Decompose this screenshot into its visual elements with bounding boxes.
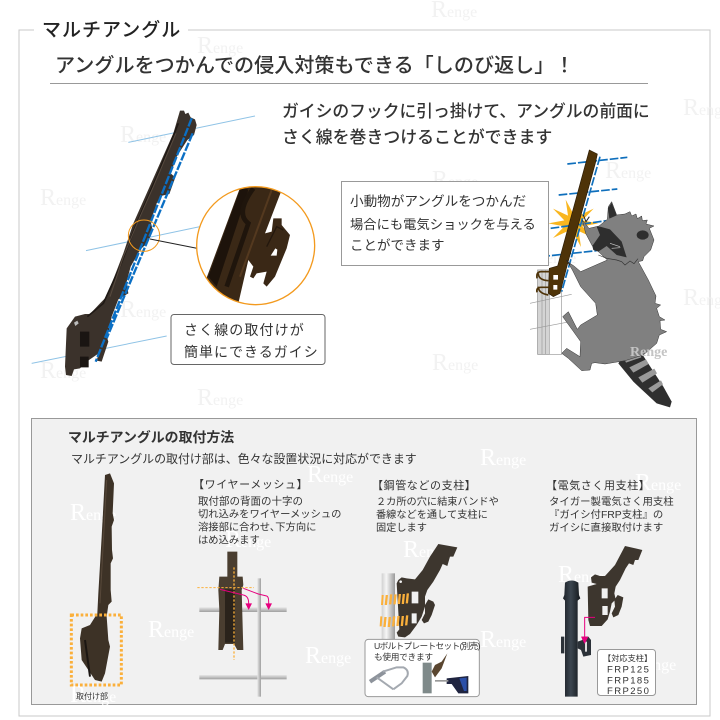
illustration: steel pipe mounting	[365, 544, 479, 697]
column: wire mesh text: 溶接部に合わせ､下方向に	[198, 520, 316, 534]
column: steel pipe text: ２カ所の穴に結束バンドや	[376, 495, 499, 508]
fence post	[530, 270, 572, 354]
column: electric fence text	[549, 495, 674, 534]
text: intro description: さく線を巻きつけることができます	[282, 127, 552, 147]
panel watermarks: Renge	[558, 562, 604, 588]
panel watermarks: Renge	[70, 500, 116, 526]
magnifier	[128, 220, 160, 251]
panel heading: マルチアングルの取付方法	[68, 429, 234, 445]
column: wire mesh text	[198, 494, 341, 546]
blue dashed lines	[96, 118, 193, 362]
angle bracket	[65, 111, 197, 376]
u-bolt note text: も使用できます	[374, 651, 433, 662]
supported posts box: 【対応支柱】	[603, 653, 652, 663]
raccoon body	[562, 202, 667, 371]
fence wires	[541, 157, 627, 292]
column: electric fence text: ガイシに直接取付けます	[549, 521, 663, 534]
callout: insulator: 簡単にできるガイシ	[184, 344, 319, 360]
callout: insulator	[171, 314, 325, 364]
spark	[548, 200, 598, 247]
heading: アングルをつかんでの侵入対策もできる「しのび返し」！	[55, 54, 574, 77]
title: section tab: マルチアングル	[42, 19, 181, 41]
panel watermarks: Renge	[403, 537, 449, 563]
background watermarks: Renge	[197, 385, 243, 411]
text: intro description	[282, 102, 650, 147]
u-bolt note text	[374, 640, 481, 662]
illustration: angle with wire	[32, 111, 320, 376]
panel intro text: マルチアングルの取付け部は、色々な設置状況に対応ができます	[71, 451, 417, 466]
panel watermarks: Renge	[225, 527, 271, 553]
background watermarks: Renge	[40, 358, 86, 384]
raccoon face mask	[592, 227, 627, 257]
column: electric fence text: タイガー製電気さく用支柱	[549, 495, 674, 508]
panel watermarks	[70, 445, 681, 708]
column: wire mesh text: 切れ込みをワイヤーメッシュの	[198, 508, 341, 520]
supported posts box: FRP250	[607, 686, 650, 697]
callout: small animals: 場合にも電気ショックを与える	[350, 217, 536, 232]
callout: small animals	[342, 182, 548, 266]
column: full angle	[71, 473, 121, 685]
panel watermarks: Renge	[480, 627, 526, 653]
supported posts box	[598, 650, 656, 697]
illustration: wire mesh mounting	[197, 552, 287, 697]
background watermarks: Renge	[40, 185, 86, 211]
mounting label: 取付け部	[76, 691, 108, 701]
column: wire mesh text: はめ込みます	[198, 534, 260, 546]
supported posts box: FRP125	[607, 664, 650, 676]
background watermarks: Renge	[197, 33, 243, 59]
background watermarks: Renge	[432, 350, 478, 376]
panel watermarks: Renge	[635, 470, 681, 496]
column: steel pipe text: 番線などを通して支柱に	[376, 508, 488, 521]
column: steel pipe text	[376, 495, 499, 534]
column: steel pipe heading: 【鋼管などの支柱】	[372, 478, 476, 492]
angle	[548, 150, 597, 297]
u-bolt note box	[365, 639, 479, 697]
illustration: FRP post mounting	[561, 546, 642, 697]
panel watermarks: Renge	[148, 617, 194, 643]
background watermarks: Renge	[605, 158, 651, 184]
callout: small animals: ことができます	[350, 238, 444, 253]
column: wire mesh heading: 【ワイヤーメッシュ】	[193, 478, 308, 491]
angle photo	[80, 473, 114, 682]
background watermarks: Renge	[120, 122, 166, 148]
background watermarks: Renge	[277, 323, 323, 349]
panel watermarks: Renge	[630, 650, 676, 676]
dotted frame	[71, 615, 121, 685]
u-bolt note text: Uボルトプレートセット(別売)	[374, 640, 481, 651]
text: intro description: ガイシのフックに引っ掛けて、アングルの前面に	[282, 102, 650, 121]
column: wire mesh text: 取付部の背面の十字の	[198, 494, 303, 508]
column: electric fence text: 『ガイシ付FRP支柱』の	[549, 508, 663, 521]
background watermarks: Renge	[432, 167, 478, 193]
panel watermarks: Renge	[480, 445, 526, 471]
background watermarks: Renge	[530, 243, 576, 269]
panel watermarks: Renge	[307, 462, 353, 488]
panel watermarks: Renge	[70, 682, 116, 708]
background watermarks: Renge	[352, 235, 398, 261]
watermark over raccoon: Renge	[630, 345, 667, 360]
illustration: raccoon on angle	[530, 150, 672, 407]
column: steel pipe text: 固定します	[376, 522, 427, 534]
supported posts box: FRP185	[607, 676, 650, 686]
raccoon tail	[618, 350, 672, 407]
callout: small animals: 小動物がアングルをつかんだ	[350, 194, 526, 209]
column: electric fence heading: 【電気さく用支柱】	[546, 478, 650, 492]
callout: insulator: さく線の取付けが	[184, 322, 305, 338]
panel: installation methods	[32, 418, 696, 708]
background watermarks	[40, 0, 720, 411]
wires	[32, 116, 255, 363]
panel watermarks: Renge	[305, 643, 351, 669]
background watermarks: Renge	[120, 297, 166, 323]
